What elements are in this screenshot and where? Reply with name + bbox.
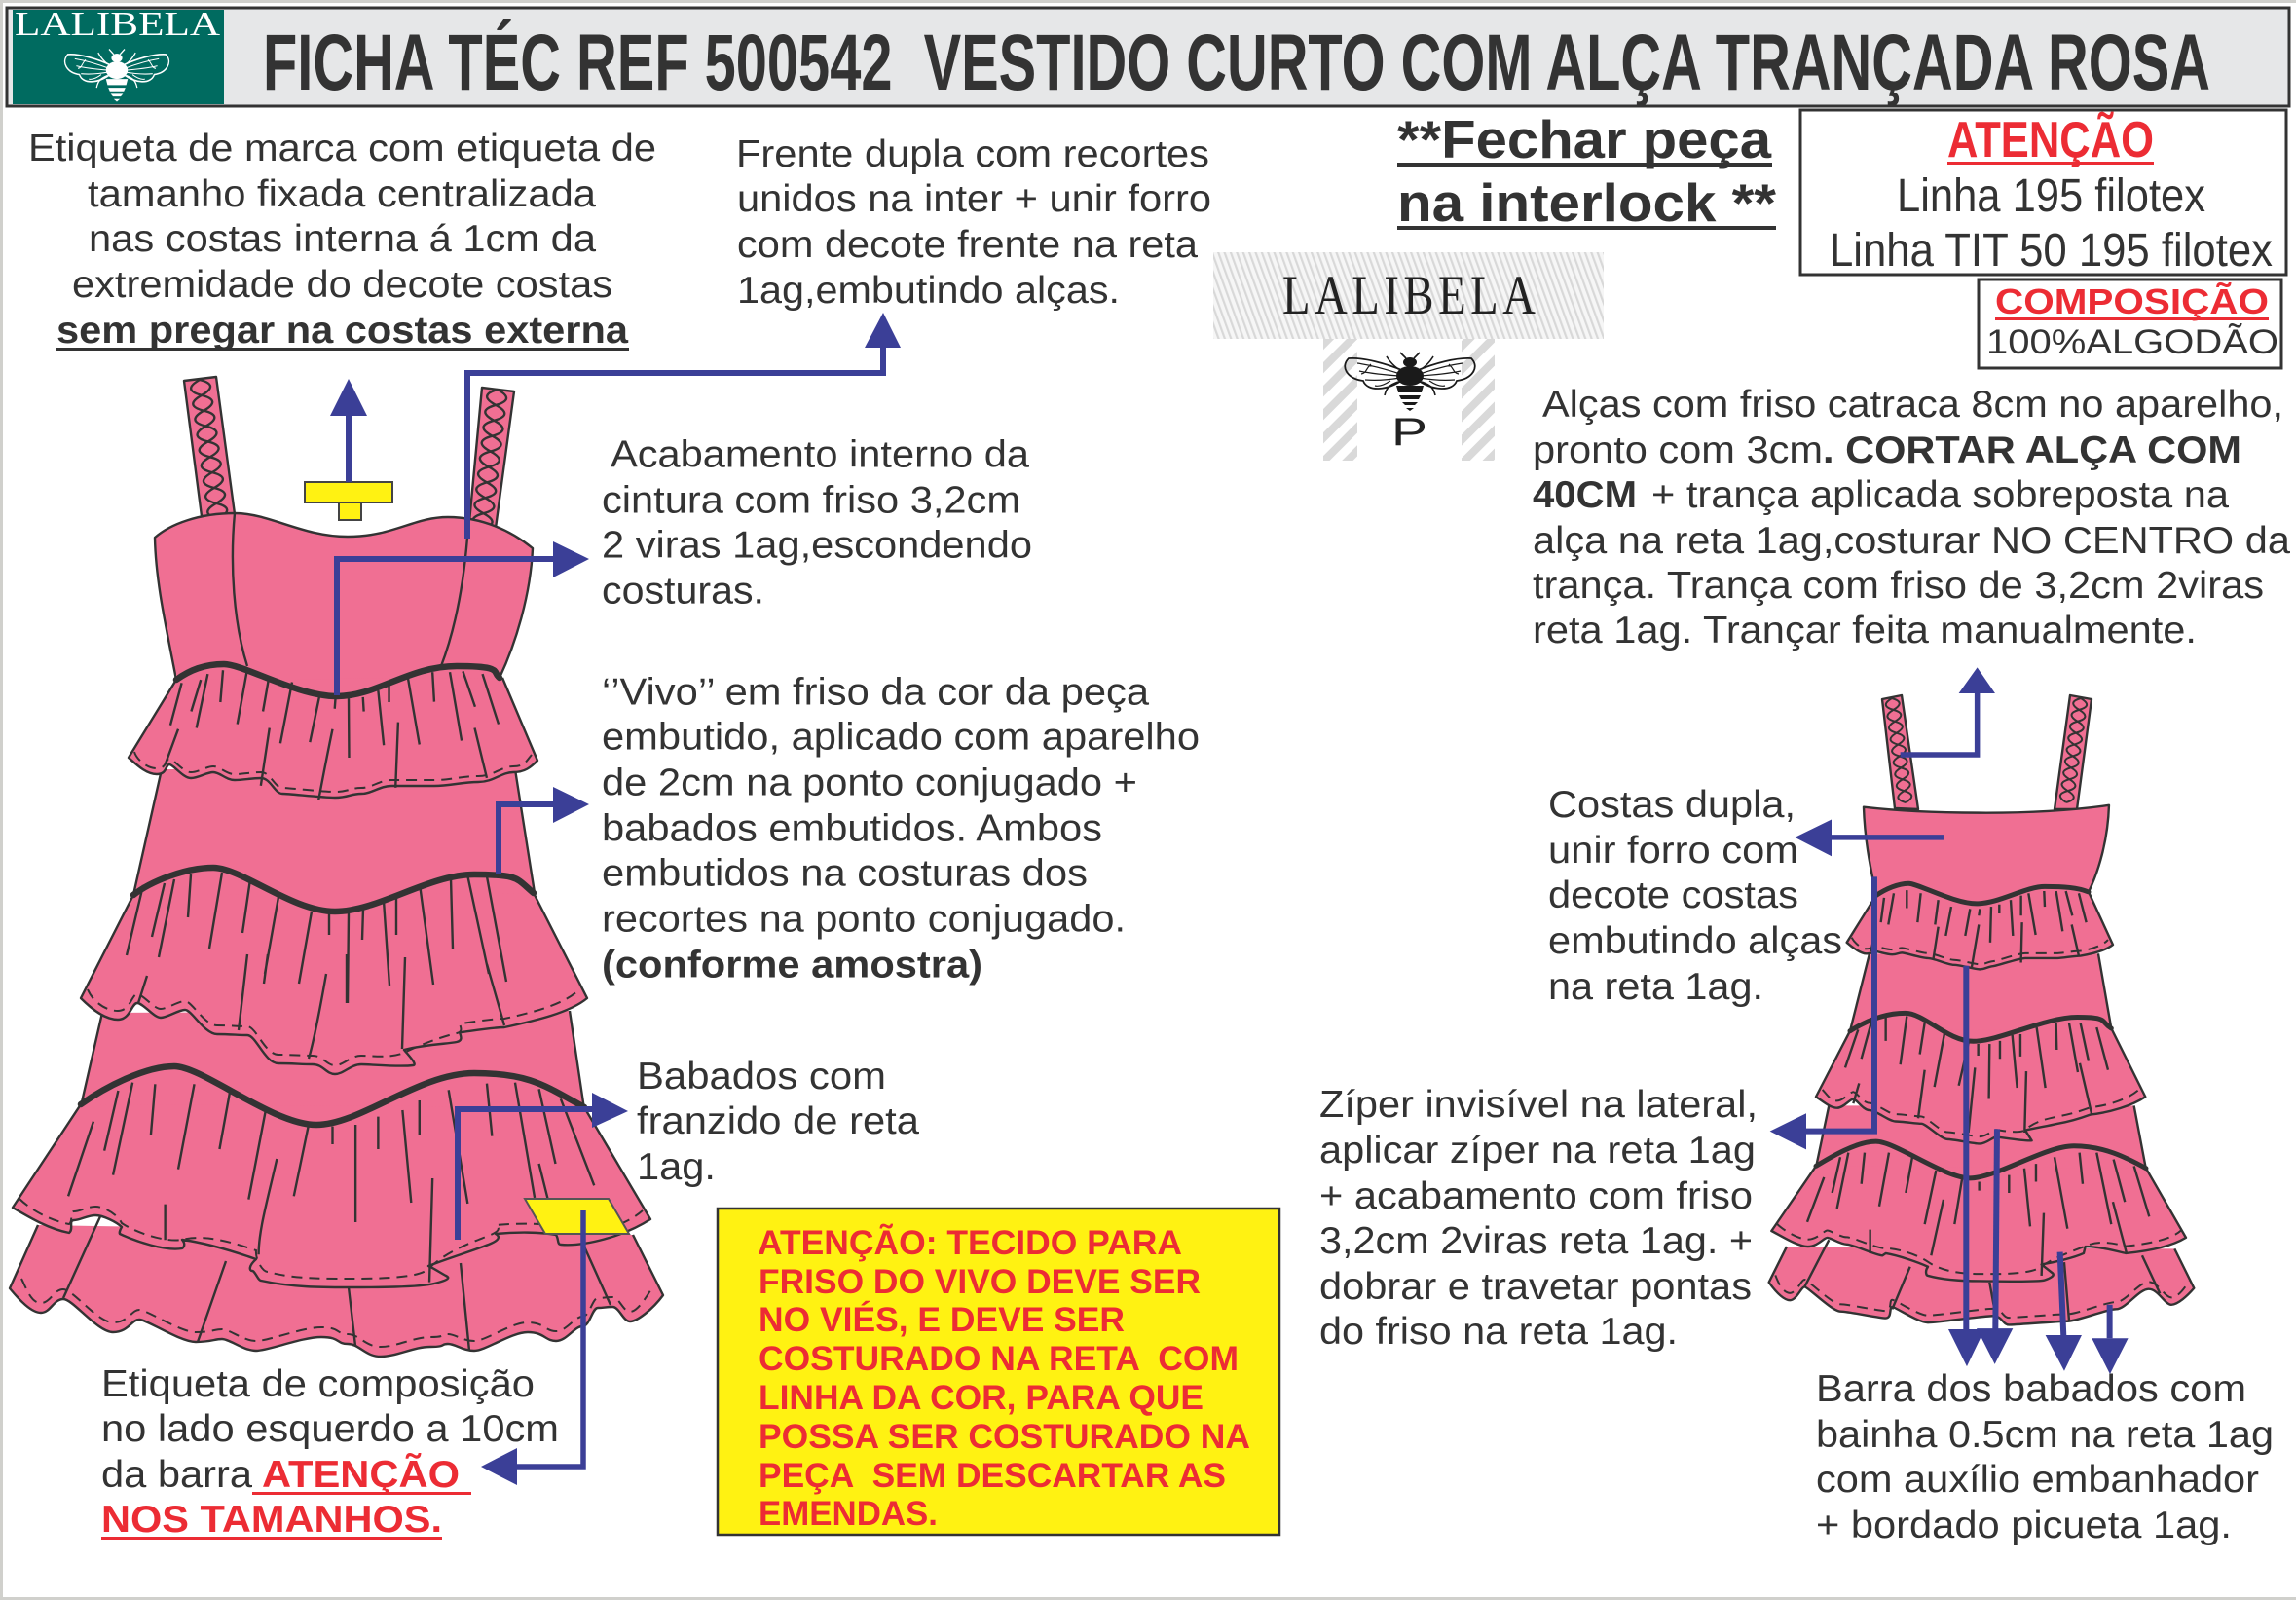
text: frente dupla: 1ag,embutindo alças. — [737, 270, 1120, 312]
text: vivo em friso: recortes na ponto conjugado. — [602, 898, 1126, 941]
text: etiqueta de marca: Etiqueta de marca com etiqueta de — [28, 128, 656, 169]
strap: back left — [1882, 695, 1918, 809]
text: zíper invisível: 3,2cm 2viras reta 1ag. + — [1319, 1220, 1753, 1262]
callout: atenção tecido: COSTURADO NA RETA COM — [759, 1340, 1239, 1378]
size label illustration — [1323, 339, 1495, 461]
text: alças: reta 1ag. Trançar feita manualmente. — [1533, 610, 2197, 651]
strap: back right — [2055, 695, 2092, 809]
text: etiqueta de marca: tamanho fixada centralizada — [88, 173, 596, 215]
text: vivo em friso: ‘’Vivo’’ em friso da cor da peça — [602, 672, 1149, 713]
back seam 1 — [1876, 883, 2089, 904]
waist seam 3 — [81, 1066, 584, 1125]
bodice — [155, 513, 533, 680]
icon: bee — [1345, 353, 1475, 411]
text: frente dupla: unidos na inter + unir forro — [737, 178, 1211, 220]
size label illustration: P — [1391, 411, 1427, 454]
note: fechar peça na interlock — [1397, 109, 1777, 233]
arrow: acabamento — [337, 541, 589, 695]
arrow: barra 1 — [1948, 966, 1984, 1366]
box: composição — [1979, 279, 2281, 368]
middle skirt — [133, 769, 535, 897]
arrow: barra 2 — [1977, 1129, 2013, 1364]
back seam 2 — [1850, 1013, 2111, 1041]
arrow: vivo — [499, 787, 589, 874]
text: alças: . CORTAR ALÇA COM — [1823, 429, 2241, 471]
text: etiqueta de composição: NOS TAMANHOS. — [101, 1499, 442, 1541]
strap: left — [184, 377, 235, 520]
text: alças: Alças com friso catraca 8cm no aparelho, — [1542, 384, 2283, 426]
back lower skirt — [1816, 1105, 2146, 1170]
callout: atenção tecido: PEÇA SEM DESCARTAR AS — [759, 1457, 1226, 1495]
back ruffle 2 — [1816, 1017, 2145, 1143]
text: etiqueta de marca — [28, 128, 656, 352]
text: babados: Babados com — [637, 1056, 886, 1098]
text: costas dupla: Costas dupla, — [1548, 784, 1796, 826]
text: zíper invisível: dobrar e travetar pontas — [1319, 1266, 1752, 1308]
text: zíper invisível: do friso na reta 1ag. — [1319, 1311, 1678, 1353]
box: composição: COMPOSIÇÃO — [1995, 280, 2269, 321]
arrow: costas dupla — [1795, 820, 1944, 856]
text: acabamento interno: 2 viras 1ag,escondendo — [602, 524, 1032, 567]
text: babados — [637, 1056, 919, 1188]
callout: atenção tecido — [718, 1209, 1279, 1535]
back middle skirt — [1850, 953, 2111, 1032]
text: etiqueta de composição: Etiqueta de composição — [101, 1363, 535, 1405]
header bar — [7, 5, 2289, 107]
callout: atenção tecido: LINHA DA COR, PARA QUE — [759, 1379, 1204, 1417]
dress: front view — [10, 377, 663, 1357]
callout: atenção tecido: EMENDAS. — [759, 1495, 938, 1533]
brand label illustration: LALIBELA — [1282, 266, 1536, 326]
text: zíper invisível — [1319, 1084, 1758, 1353]
box: atenção linha: Linha 195 filotex — [1897, 170, 2205, 222]
ruffle 1 — [129, 670, 537, 800]
arrow: etiqueta composição — [481, 1210, 583, 1485]
text: alças — [1533, 384, 2290, 651]
strap: right — [469, 388, 514, 530]
text: frente dupla: Frente dupla com recortes — [736, 133, 1209, 175]
box: composição: 100%ALGODÃO — [1986, 323, 2278, 361]
text: zíper invisível: + acabamento com friso — [1319, 1175, 1753, 1217]
text: etiqueta de composição: da barra — [101, 1454, 252, 1496]
arrow: alças — [1901, 667, 1995, 755]
callout: atenção tecido: POSSA SER COSTURADO NA — [759, 1418, 1250, 1456]
text: vivo em friso: (conforme amostra) — [602, 945, 982, 986]
ruffle 3 — [13, 1083, 650, 1287]
bodice seams — [233, 513, 467, 666]
text: zíper invisível: aplicar zíper na reta 1ag — [1319, 1130, 1756, 1172]
text: babados: 1ag. — [637, 1146, 716, 1188]
arrow: frente dupla — [467, 313, 901, 539]
lower skirt — [81, 1011, 584, 1109]
text: vivo em friso: babados embutidos. Ambos — [602, 808, 1102, 849]
text: acabamento interno: cintura com friso 3,2cm — [602, 479, 1020, 522]
text: acabamento interno: costuras. — [602, 571, 764, 612]
text: barra dos babados: com auxílio embanhador — [1816, 1459, 2259, 1501]
dress: back view — [1769, 667, 2194, 1374]
text: etiqueta de marca: sem pregar na costas externa — [56, 310, 628, 352]
text: acabamento interno — [602, 434, 1032, 612]
text: costas dupla — [1548, 784, 1842, 1008]
text: costas dupla: embutindo alças — [1548, 920, 1842, 962]
text: acabamento interno: Acabamento interno da — [611, 434, 1029, 475]
text: vivo em friso: embutidos na costuras dos — [602, 853, 1088, 894]
text: etiqueta de marca: nas costas interna á 1cm da — [89, 218, 596, 260]
note: fechar peça na interlock: **Fechar peça — [1397, 109, 1771, 169]
text: etiqueta de marca: extremidade do decote costas — [72, 264, 612, 306]
ruffle 2 — [81, 873, 587, 1074]
box: atenção linha — [1800, 110, 2286, 277]
composition label position marker — [525, 1199, 629, 1234]
text: alças: 40CM — [1533, 474, 1637, 516]
text: alças: pronto com 3cm — [1533, 429, 1823, 471]
arrow: zíper — [1770, 876, 1874, 1149]
brand label illustration — [1213, 252, 1604, 339]
text: barra dos babados: Barra dos babados com — [1816, 1368, 2246, 1410]
callout: atenção tecido: ATENÇÃO: TECIDO PARA — [758, 1224, 1182, 1262]
text: frente dupla — [736, 133, 1211, 312]
arrow: babados — [458, 1093, 628, 1240]
text: alças: alça na reta 1ag,costurar NO CENTRO da — [1533, 520, 2290, 562]
arrow: brand label up — [330, 379, 367, 482]
text: barra dos babados: bainha 0.5cm na reta 1ag — [1816, 1414, 2274, 1456]
text: costas dupla: na reta 1ag. — [1548, 966, 1763, 1008]
text: zíper invisível: Zíper invisível na lateral, — [1319, 1084, 1758, 1126]
waist seam 2 — [133, 868, 534, 912]
text: barra dos babados: + bordado picueta 1ag. — [1816, 1505, 2232, 1546]
text: costas dupla: decote costas — [1548, 874, 1798, 916]
text: vivo em friso: embutido, aplicado com aparelho — [602, 717, 1200, 758]
text: babados: franzido de reta — [637, 1100, 919, 1142]
text: etiqueta de composição — [101, 1363, 559, 1541]
bottom tier — [10, 1214, 663, 1357]
text: alças: trança. Trança com friso de 3,2cm 2viras — [1533, 565, 2264, 607]
callout: atenção tecido: FRISO DO VIVO DEVE SER — [759, 1263, 1201, 1301]
back bodice — [1864, 805, 2109, 893]
back bottom tier — [1769, 1240, 2194, 1324]
box: atenção linha: ATENÇÃO — [1947, 111, 2154, 168]
back ruffle 3 — [1771, 1153, 2186, 1282]
brand logo: LALIBELA: LALIBELA — [15, 5, 221, 43]
waist seam 1 — [176, 664, 500, 696]
text: barra dos babados — [1816, 1368, 2274, 1546]
brand label position marker — [305, 482, 392, 520]
brand logo: LALIBELA — [13, 5, 224, 104]
note: fechar peça na interlock: na interlock ** — [1397, 172, 1777, 233]
text: etiqueta de composição: no lado esquerdo a 10cm — [101, 1408, 559, 1450]
text: vivo em friso: de 2cm na ponto conjugado + — [602, 762, 1137, 804]
text: alças: + trança aplicada sobreposta na — [1651, 474, 2229, 516]
callout: atenção tecido: NO VIÉS, E DEVE SER — [759, 1300, 1125, 1339]
text: vivo em friso — [602, 672, 1200, 986]
text: costas dupla: unir forro com — [1548, 830, 1798, 872]
back ruffle 1 — [1847, 886, 2113, 969]
text: frente dupla: com decote frente na reta — [737, 224, 1198, 266]
arrow: barra 3 — [2046, 1252, 2082, 1371]
back seam 3 — [1816, 1141, 2146, 1178]
text: etiqueta de composição: ATENÇÃO — [262, 1453, 460, 1496]
arrow: barra 4 — [2092, 1305, 2129, 1374]
